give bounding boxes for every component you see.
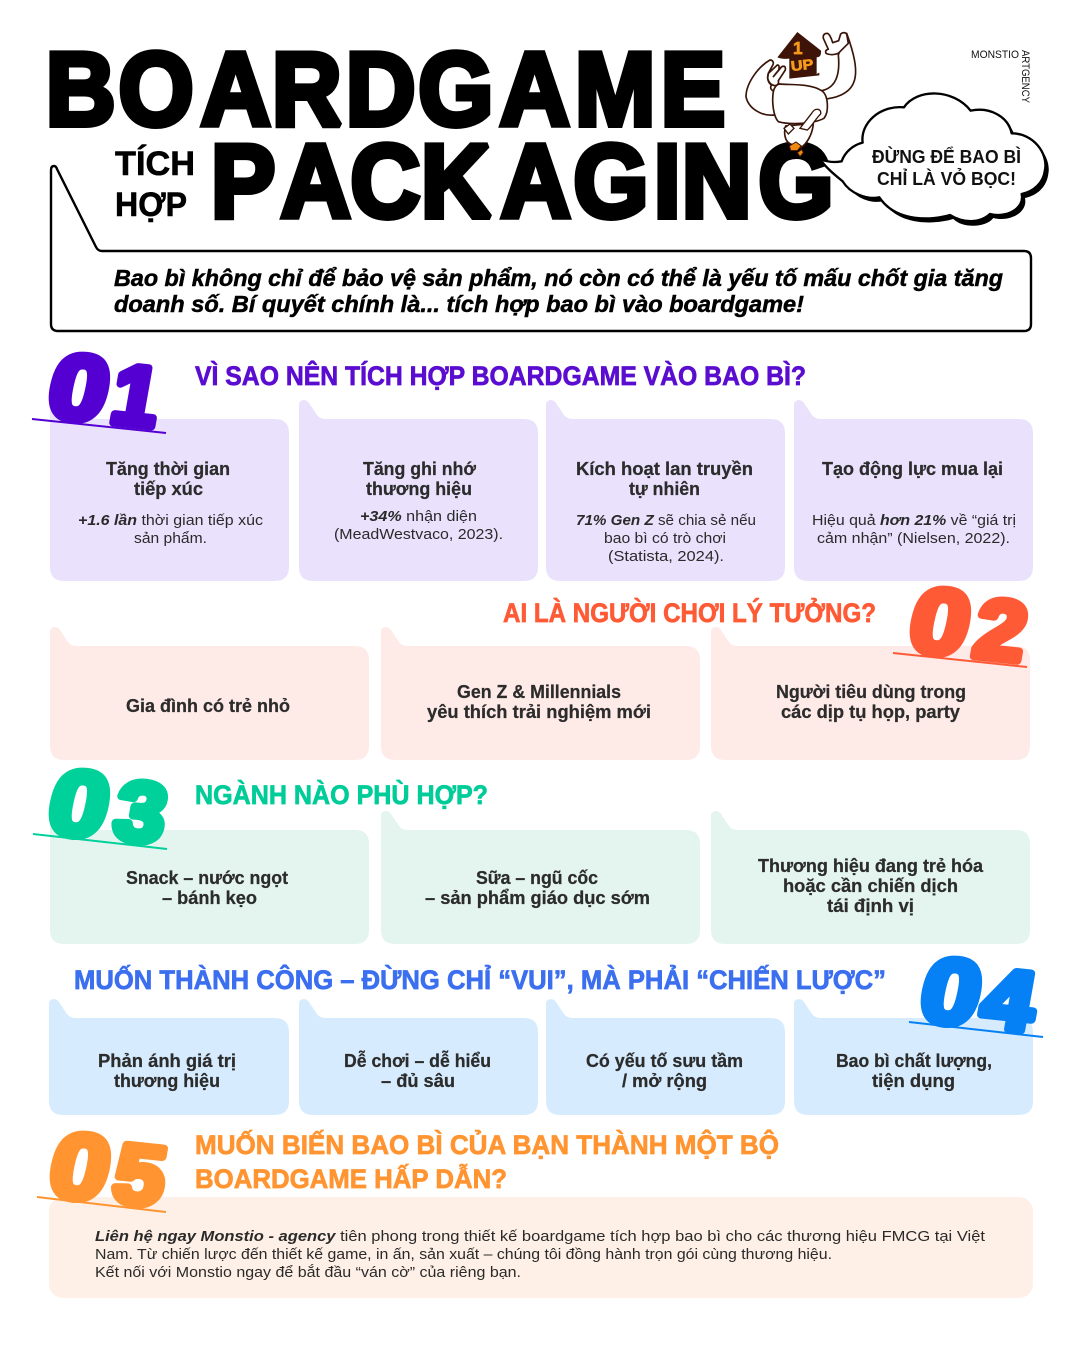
card: Phản ánh giá trị: thương hiệu <box>114 1071 220 1091</box>
card: Kích hoạt lan truyền tự nhiên: tự nhiên <box>629 479 700 499</box>
number 05: 0 <box>41 1113 120 1221</box>
card: Tăng thời gian tiếp xúc: +1.6 lần thời gian tiếp xúc <box>78 512 264 529</box>
intro text: Bao bì không chỉ để bảo vệ sản phẩm, nó còn có thể là yếu tố mấu chốt gia tăng <box>114 265 1003 291</box>
number 01 <box>32 334 167 445</box>
card: Tăng ghi nhớ thương hiệu: +34% nhận diện <box>360 508 477 525</box>
card: Có yếu tố sưu tầm <box>546 999 785 1115</box>
card: Bao bì chất lượng <box>794 999 1033 1115</box>
number 04: 0 <box>912 938 991 1046</box>
heading 04: MUỐN THÀNH CÔNG – ĐỪNG CHỈ “VUI”, MÀ PHẢI “CHIẾN LƯỢC” <box>74 963 886 995</box>
title: PACKAGING: PACKAGING <box>211 124 834 240</box>
panel: contact: Liên hệ ngay Monstio - agency tiên phong trong thiết kế boardgame tích hợp bao bì cho các thương hiệu FMCG tại Việt <box>95 1228 986 1245</box>
card: Người tiêu dùng: Người tiêu dùng trong <box>776 682 966 702</box>
card: Tăng thời gian tiếp xúc <box>50 400 289 581</box>
panel: contact <box>49 1197 1033 1298</box>
card: Dễ chơi <box>299 999 538 1115</box>
card: Thương hiệu trẻ hóa: hoặc cần chiến dịch <box>783 876 958 896</box>
section 02 <box>50 568 1034 760</box>
heading 02: AI LÀ NGƯỜI CHƠI LÝ TƯỞNG? <box>503 596 876 628</box>
icon: mascot holding 1UP arrow <box>746 32 856 157</box>
card: Kích hoạt lan truyền tự nhiên: 71% Gen Z sẽ chia sẻ nếu <box>576 512 756 529</box>
card: Snack: – bánh kẹo <box>162 888 257 908</box>
card: Thương hiệu trẻ hóa: Thương hiệu đang trẻ hóa <box>758 856 984 876</box>
card: Tăng ghi nhớ thương hiệu <box>299 400 538 581</box>
card: Kích hoạt lan truyền tự nhiên: bao bì có trò chơi <box>604 530 726 547</box>
number 03 <box>33 750 174 861</box>
card: Dễ chơi: – đủ sâu <box>381 1071 455 1091</box>
card: Sữa: – sản phẩm giáo dục sớm <box>425 888 650 908</box>
callout text: CHỈ LÀ VỎ BỌC! <box>877 168 1016 189</box>
number 05: 5 <box>107 1126 173 1224</box>
card: Thương hiệu trẻ hóa: tái định vị <box>827 896 914 916</box>
section 04 <box>49 938 1043 1115</box>
card: Tạo động lực mua lại <box>794 400 1033 581</box>
card: Thương hiệu trẻ hóa <box>711 811 1030 944</box>
number 05 <box>37 1113 173 1224</box>
number 01: 1 <box>105 347 167 445</box>
title: TÍCH HỢP <box>115 145 195 224</box>
number 04 <box>909 938 1043 1049</box>
card: Có yếu tố sưu tầm: Có yếu tố sưu tầm <box>586 1051 743 1071</box>
icon: 1UP arrow sign: UP <box>790 56 814 74</box>
card: Snack: Snack – nước ngọt <box>126 868 288 888</box>
heading 05: BOARDGAME HẤP DẪN? <box>195 1163 507 1194</box>
number 01: 0 <box>40 334 119 442</box>
callout cloud <box>820 93 1049 226</box>
callout text <box>872 146 1021 189</box>
heading 05 <box>195 1128 779 1194</box>
brand label: MONSTIO ARTGENCY <box>971 49 1031 104</box>
card: Tăng ghi nhớ thương hiệu: thương hiệu <box>366 479 472 499</box>
number 03: 3 <box>108 763 174 861</box>
number 03: 0 <box>40 750 119 858</box>
card: Bao bì chất lượng: Bao bì chất lượng, <box>836 1051 992 1071</box>
title: BOARDGAME: BOARDGAME <box>46 32 725 148</box>
card: Gen Z & Millennials: yêu thích trải nghiệm mới <box>427 702 651 722</box>
intro text <box>114 265 1003 317</box>
card: Bao bì chất lượng: tiện dụng <box>872 1071 955 1091</box>
callout text: ĐỪNG ĐỂ BAO BÌ <box>872 146 1021 167</box>
card: Gen Z & Millennials <box>381 627 700 760</box>
card: Dễ chơi: Dễ chơi – dễ hiểu <box>344 1050 491 1071</box>
card: Sữa <box>381 811 700 944</box>
card: Phản ánh giá trị <box>49 999 289 1115</box>
card: Gen Z & Millennials: Gen Z & Millennials <box>457 682 621 702</box>
heading 03: NGÀNH NÀO PHÙ HỢP? <box>195 779 488 810</box>
card: Kích hoạt lan truyền tự nhiên: Kích hoạt lan truyền <box>576 459 753 479</box>
card: Gia đình có trẻ nhỏ: Gia đình có trẻ nhỏ <box>126 696 290 716</box>
heading 05: MUỐN BIẾN BAO BÌ CỦA BẠN THÀNH MỘT BỘ <box>195 1128 779 1160</box>
card: Phản ánh giá trị: Phản ánh giá trị <box>98 1051 236 1071</box>
card: Tạo động lực mua lại: Tạo động lực mua lại <box>822 459 1003 479</box>
number 02 <box>893 568 1034 679</box>
section 03 <box>33 750 1030 944</box>
heading 01: VÌ SAO NÊN TÍCH HỢP BOARDGAME VÀO BAO BÌ? <box>195 360 806 391</box>
section 01 <box>32 334 1033 581</box>
card: Người tiêu dùng <box>711 627 1030 760</box>
panel: contact: Kết nối với Monstio ngay để bắt đầu “ván cờ” của riêng bạn. <box>95 1264 521 1281</box>
card: Sữa: Sữa – ngũ cốc <box>476 868 598 888</box>
title: TÍCH HỢP: HỢP <box>115 186 187 224</box>
intro text: doanh số. Bí quyết chính là... tích hợp bao bì vào boardgame! <box>114 291 804 317</box>
panel: contact: Nam. Từ chiến lược đến thiết kế game, in ấn, sản xuất – chúng tôi đồng hành trọn gói cùng thương hiệu. <box>95 1246 832 1263</box>
brand label: MONSTIO ARTGENCY: MONSTIO <box>971 49 1019 61</box>
brand label: MONSTIO ARTGENCY: ARTGENCY <box>1019 50 1031 104</box>
section 05 <box>37 1113 1033 1298</box>
card: Tăng ghi nhớ thương hiệu: Tăng ghi nhớ <box>363 459 476 479</box>
number 04: 4 <box>975 951 1043 1049</box>
card: Tăng thời gian tiếp xúc: Tăng thời gian <box>106 459 230 479</box>
card: Có yếu tố sưu tầm: / mở rộng <box>622 1071 707 1091</box>
card: Tăng thời gian tiếp xúc: sản phẩm. <box>134 530 207 547</box>
icon: 1UP arrow sign <box>777 32 821 79</box>
card: Gia đình có trẻ nhỏ <box>50 627 369 760</box>
intro speech box <box>51 166 1031 331</box>
card: Kích hoạt lan truyền tự nhiên: (Statista, 2024). <box>608 548 724 565</box>
card: Kích hoạt lan truyền tự nhiên <box>546 400 785 581</box>
card: Tăng thời gian tiếp xúc: tiếp xúc <box>134 479 203 499</box>
number 02: 2 <box>968 581 1034 679</box>
number 02: 0 <box>901 568 980 676</box>
card: Người tiêu dùng: các dịp tụ họp, party <box>781 702 960 722</box>
title: TÍCH HỢP: TÍCH <box>115 145 195 183</box>
icon: 1UP arrow sign: 1 <box>793 38 803 58</box>
card: Tăng ghi nhớ thương hiệu: (MeadWestvaco, 2023). <box>334 526 503 543</box>
card: Tạo động lực mua lại: Hiệu quả hơn 21% về “giá trị <box>812 512 1016 529</box>
card: Tạo động lực mua lại: cảm nhận” (Nielsen, 2022). <box>817 530 1010 547</box>
card: Snack <box>50 811 369 944</box>
